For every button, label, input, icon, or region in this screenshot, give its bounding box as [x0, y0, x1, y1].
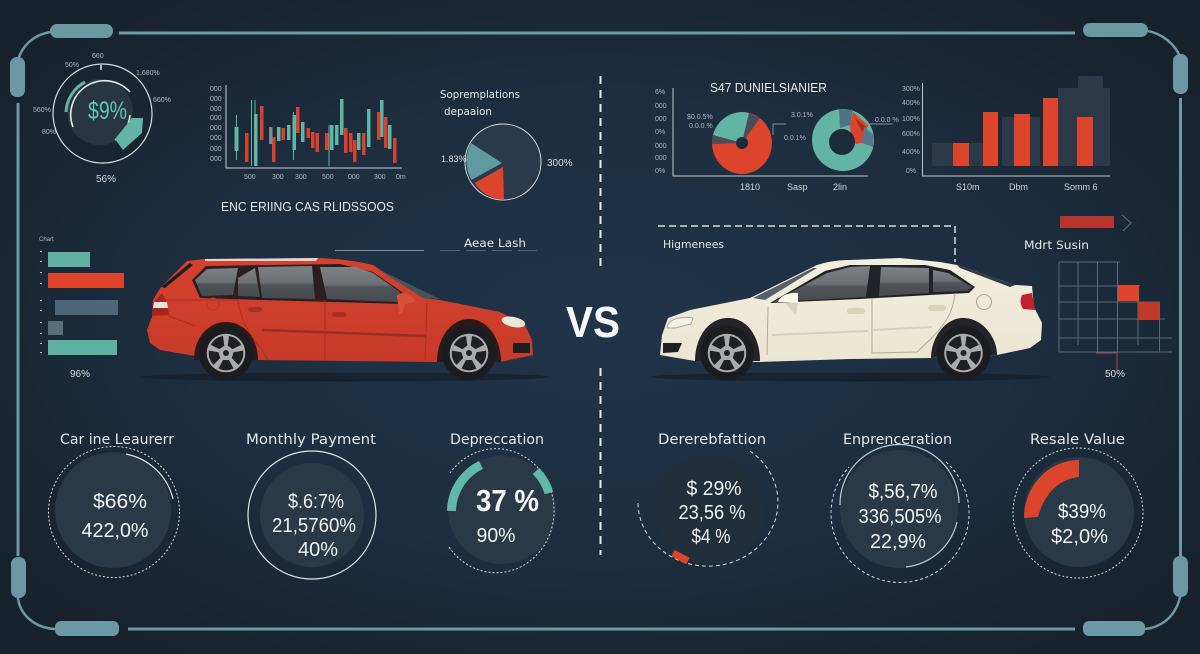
pie charts: top right: 6%: [655, 89, 665, 96]
heatmap grid chart: 50%: [1105, 369, 1125, 380]
pie charts: top right: 0.0.0.%: [689, 123, 713, 130]
pie charts: top right: [655, 80, 899, 192]
candlestick chart: 000: [210, 135, 222, 142]
pie charts: top right: 000: [655, 143, 667, 150]
dashed callout: white car: Higmenees: [663, 239, 724, 251]
metric circle: depreciation: [448, 432, 556, 573]
metric circle: monthly payment: [246, 432, 376, 579]
car: white sedan: [650, 258, 1050, 382]
bar chart: top right: [902, 76, 1110, 192]
candlestick chart: 000: [210, 115, 222, 122]
gauge: top left: $9%: [88, 97, 127, 125]
metric circle: depreciation: Depreccation: [450, 432, 544, 448]
metric circle: enprenceration: [831, 432, 969, 582]
metric circle: enprenceration: Enprenceration: [843, 432, 952, 448]
metric circle: monthly payment: Monthly Payment: [246, 432, 376, 448]
pie charts: top right: 000: [655, 103, 667, 110]
gauge: top left: [33, 53, 171, 185]
candlestick chart: 300: [374, 174, 386, 181]
bar chart: top right: 100%: [902, 116, 920, 123]
pie charts: top right: 000: [655, 155, 667, 162]
gauge: top left: 660%: [153, 97, 171, 104]
metric circle: depreciation right: $4 %: [692, 526, 731, 548]
pie chart: depreciation: [440, 89, 573, 200]
bar chart: top right: Somm 6: [1064, 182, 1098, 192]
pie charts: top right: Sasp: [787, 182, 808, 192]
label: red car: Aeae Lash: [464, 236, 526, 250]
metric circle: resale value: $2,0%: [1051, 526, 1108, 548]
candlestick chart: 300: [272, 174, 284, 181]
metric circle: enprenceration: $,56,7%: [868, 481, 938, 503]
metric circle: monthly payment: 21,5760%: [272, 515, 356, 537]
candlestick chart: 000: [210, 146, 222, 153]
pie chart: depreciation: depaaion: [444, 106, 492, 118]
metric circle: car line leader: $66%: [93, 491, 147, 513]
candlestick chart: 000: [210, 86, 222, 93]
car: red wagon: [140, 258, 550, 382]
gauge: top left: 1,680%: [136, 70, 160, 77]
metric circle: resale value: [1013, 432, 1143, 578]
bar chart: top right: 300%: [902, 86, 920, 93]
metric circle: depreciation right: Dererebfattion: [658, 432, 766, 448]
heading: VS: VS: [566, 298, 620, 347]
pie charts: top right: $0.0.5%: [687, 114, 713, 121]
candlestick chart: 300: [295, 174, 307, 181]
bar chart: top right: 600%: [902, 131, 920, 138]
metric circle: car line leader: Car ine Leaurerr: [60, 432, 174, 448]
pie charts: top right: 0%: [655, 129, 665, 136]
metric circle: resale value: $39%: [1058, 501, 1106, 523]
pie charts: top right: 0%: [655, 168, 665, 175]
metric circle: depreciation right: [638, 432, 778, 566]
bar chart: top right: 400%: [902, 100, 920, 107]
pie charts: top right: 0.0.1%: [784, 135, 806, 142]
metric circle: depreciation right: 23,56 %: [678, 502, 746, 524]
candlestick chart: 000: [210, 106, 222, 113]
legend bar chart: left: Chart: [39, 237, 54, 243]
gauge: top left: 50%: [65, 62, 79, 69]
heatmap grid chart: [1024, 238, 1172, 380]
pie charts: top right: 000: [655, 116, 667, 123]
legend bar chart: left: 96%: [70, 369, 90, 380]
metric circle: car line leader: 422,0%: [82, 520, 149, 542]
gauge: top left: 660: [92, 53, 104, 60]
pie chart: depreciation: 1.83%: [441, 154, 467, 164]
candlestick chart: [210, 85, 406, 181]
metric circle: enprenceration: 22,9%: [870, 531, 926, 553]
metric circle: monthly payment: 40%: [298, 539, 338, 561]
gauge: top left: 56%: [96, 174, 116, 185]
candlestick chart: 000: [210, 156, 222, 163]
candlestick chart: 000: [210, 125, 222, 132]
metric circle: depreciation: 37 %: [476, 483, 539, 518]
candlestick chart: 500: [244, 174, 256, 181]
pie charts: top right: 3.0.1%: [791, 112, 813, 119]
metric circle: depreciation: 90%: [476, 525, 516, 547]
pie charts: top right: 1810: [740, 182, 760, 192]
candlestick chart: 500: [322, 174, 334, 181]
gauge: top left: 80%: [42, 129, 56, 136]
metric circle: monthly payment: $.6:7%: [288, 491, 344, 513]
center divider: [600, 76, 602, 555]
heading: left chart caption: ENC ERIING CAS RLIDSSOOS: [221, 199, 394, 214]
arrow marker: red bar: [1060, 215, 1131, 231]
bar chart: top right: 0%: [906, 168, 916, 175]
bar chart: top right: S10m: [956, 182, 980, 192]
dashed callout: white car: [658, 226, 955, 262]
bar chart: top right: Dbm: [1009, 182, 1028, 192]
pie charts: top right: S47 DUNIELSIANIER: [710, 80, 827, 95]
pie chart: depreciation: Sopremplations: [440, 89, 520, 101]
pie chart: depreciation: 300%: [547, 158, 573, 169]
metric circle: resale value: Resale Value: [1030, 432, 1125, 448]
heatmap grid chart: Mdrt Susin: [1024, 238, 1089, 252]
metric circle: enprenceration: 336,505%: [858, 506, 942, 528]
metric circle: car line leader: [48, 432, 180, 578]
metric circle: depreciation right: $ 29%: [686, 478, 742, 500]
pie charts: top right: 0.0.0 %: [875, 117, 899, 124]
gauge: top left: 560%: [33, 107, 51, 114]
candlestick chart: 000: [348, 174, 360, 181]
pie charts: top right: 2lin: [833, 182, 847, 192]
candlestick chart: 000: [210, 96, 222, 103]
candlestick chart: 0m: [396, 174, 406, 181]
bar chart: top right: 400%: [902, 149, 920, 156]
legend bar chart: left: [39, 237, 124, 380]
